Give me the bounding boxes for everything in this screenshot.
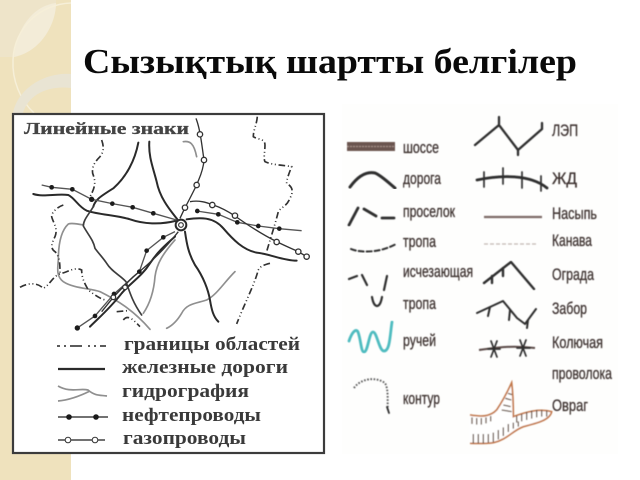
symbol: barbed wire xyxy=(479,333,612,383)
symbol: highway: шоссе xyxy=(403,138,439,157)
symbol: wooden fence: Забор xyxy=(552,299,587,318)
symbol: ditch: Канава xyxy=(552,231,592,250)
panel: linear signs map xyxy=(13,114,324,453)
legend: oil pipelines xyxy=(58,405,261,426)
map network xyxy=(20,117,309,331)
symbol: contour xyxy=(354,379,440,413)
symbol: stream: ручей xyxy=(403,331,436,350)
map heading: Линейные знаки xyxy=(24,119,189,138)
symbol: embankment xyxy=(484,204,597,223)
legend: gas pipelines xyxy=(58,428,246,449)
symbol: vanishing path xyxy=(349,262,473,313)
symbol: wooden fence xyxy=(477,299,587,328)
symbol: power line xyxy=(475,117,578,155)
symbol: power line: ЛЭП xyxy=(552,121,578,140)
symbol: vanishing path: исчезающая xyxy=(403,262,473,281)
symbol: barbed wire: проволока xyxy=(552,364,612,383)
symbol: railway: ЖД xyxy=(552,169,577,188)
symbol: stream xyxy=(349,322,436,352)
symbol: highway xyxy=(347,138,439,157)
symbol: ditch xyxy=(484,231,592,250)
decorative sidebar xyxy=(0,0,71,480)
legend: railways: железные дороги xyxy=(122,357,288,378)
symbol: vanishing path: тропа xyxy=(403,294,436,313)
legend: oil pipelines: нефтепроводы xyxy=(122,405,261,426)
map frame xyxy=(13,114,324,453)
legend: gas pipelines: газопроводы xyxy=(123,428,246,449)
symbol: fence xyxy=(484,262,594,289)
symbol: path xyxy=(351,232,436,252)
symbol: contour: контур xyxy=(403,389,440,408)
legend: region borders: границы областей xyxy=(124,334,300,355)
map legend xyxy=(57,334,300,449)
symbol: railway xyxy=(477,168,577,191)
symbol: ravine: Овраг xyxy=(552,396,588,415)
symbol: ravine xyxy=(470,383,588,443)
symbol: fence: Ограда xyxy=(552,265,594,284)
symbol: dirt road xyxy=(349,202,455,225)
symbol: dirt road: проселок xyxy=(403,202,455,221)
legend: hydrography xyxy=(58,381,249,402)
symbol: road xyxy=(350,169,441,188)
legend: hydrography: гидрография xyxy=(122,381,249,402)
symbol: barbed wire: Колючая xyxy=(552,333,603,352)
title: Сызықтық шартты белгілер xyxy=(83,42,577,81)
panel: topographic line symbols xyxy=(342,104,618,454)
symbol: path: тропа xyxy=(403,232,436,251)
symbol: road: дорога xyxy=(403,169,441,188)
symbol: embankment: Насыпь xyxy=(552,204,597,223)
